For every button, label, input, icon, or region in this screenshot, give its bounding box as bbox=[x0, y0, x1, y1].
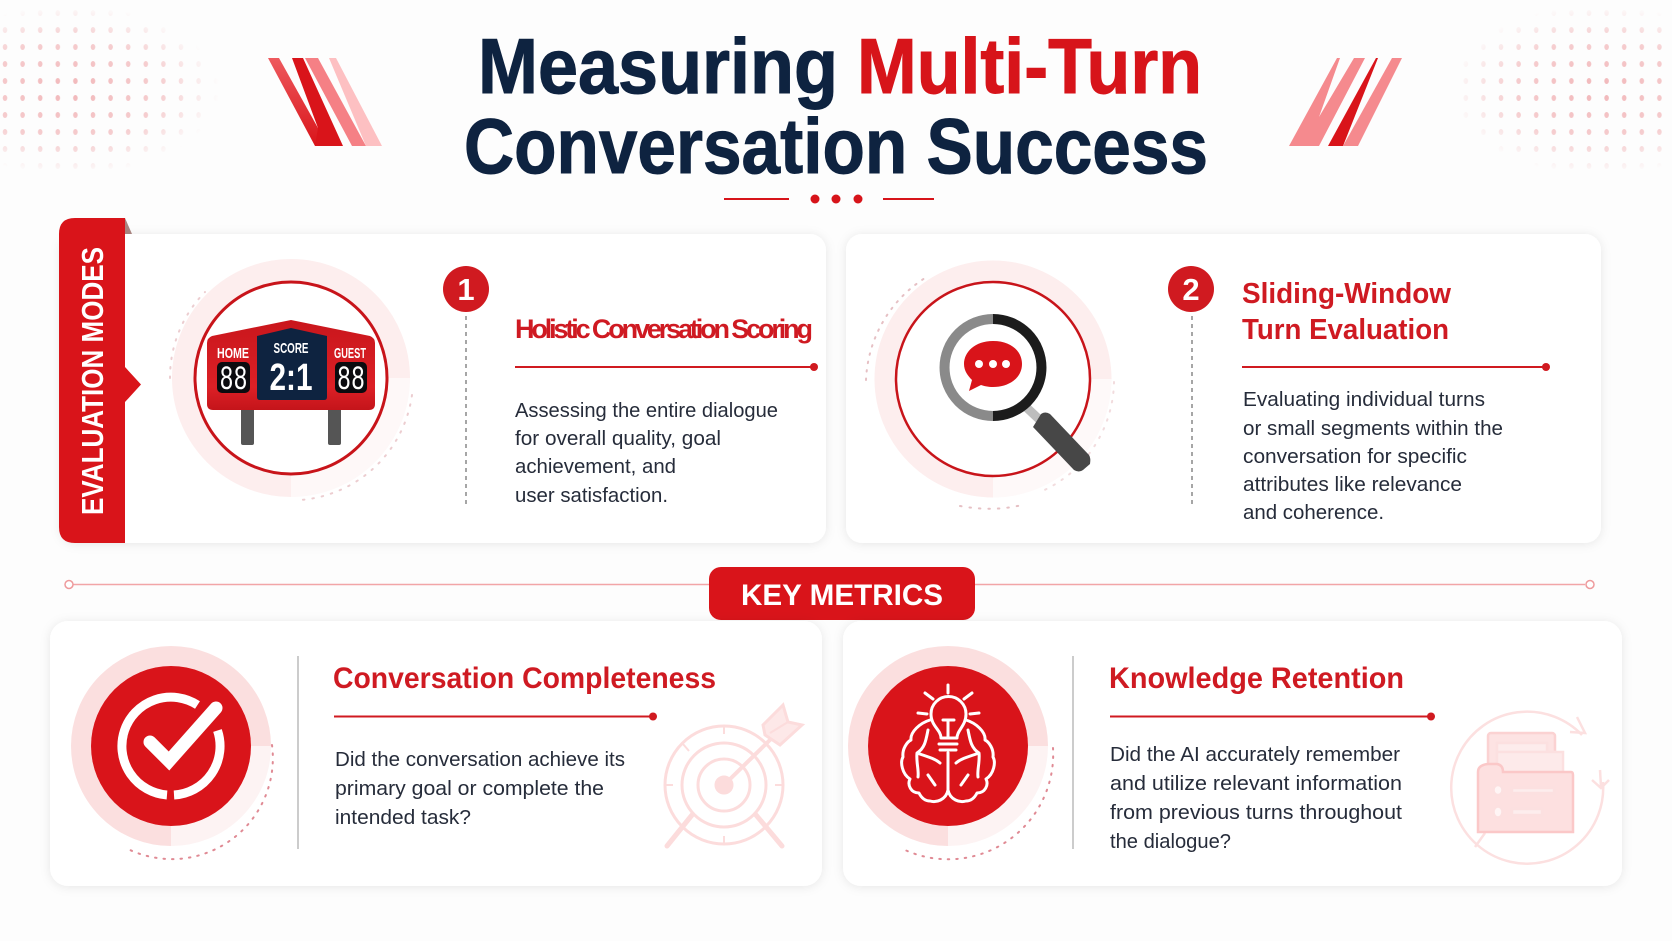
number badge 1 bbox=[443, 266, 489, 312]
number badge 1: 1 bbox=[457, 272, 475, 307]
text block: completeness description: Did the conversation achieve its bbox=[335, 748, 625, 771]
text block: sliding-window description: Evaluating individual turns bbox=[1243, 388, 1485, 411]
heading: knowledge retention: Knowledge Retention bbox=[1109, 662, 1404, 695]
title divider bbox=[724, 194, 934, 204]
text block: retention description bbox=[1110, 743, 1402, 853]
title: Multi-Turn bbox=[857, 22, 1202, 110]
text block: completeness description: primary goal or complete the bbox=[335, 777, 604, 800]
icon: faded folder and cycle arrows bbox=[1451, 712, 1609, 864]
title bbox=[464, 22, 1208, 190]
text block: sliding-window description bbox=[1243, 388, 1503, 524]
text block: retention description: from previous turns throughout bbox=[1110, 801, 1402, 824]
icon: scoreboard: SCORE bbox=[274, 340, 308, 357]
text block: holistic description bbox=[515, 399, 778, 507]
number badge 2: 2 bbox=[1182, 272, 1200, 307]
heading: sliding-window turn evaluation: Turn Evaluation bbox=[1242, 314, 1449, 346]
icon: brain and lightbulb bbox=[858, 656, 1053, 859]
label tab: evaluation modes: EVALUATION MODES bbox=[75, 247, 110, 515]
text block: retention description: Did the AI accurately remember bbox=[1110, 743, 1400, 766]
text block: sliding-window description: and coherence. bbox=[1243, 501, 1384, 524]
panel: sliding-window turn evaluation bbox=[846, 234, 1601, 543]
text block: sliding-window description: attributes like relevance bbox=[1243, 473, 1462, 496]
icon: scoreboard: 88 bbox=[337, 362, 365, 400]
title: Measuring bbox=[478, 22, 838, 110]
text block: holistic description: user satisfaction. bbox=[515, 484, 668, 507]
title: Conversation Success bbox=[464, 102, 1208, 190]
section divider: key metrics bbox=[65, 567, 1594, 620]
label tab: evaluation modes bbox=[59, 218, 141, 543]
heading: sliding-window turn evaluation bbox=[1242, 278, 1451, 346]
icon: check mark bbox=[81, 656, 273, 859]
text block: sliding-window description: conversation for specific bbox=[1243, 445, 1467, 468]
heading: holistic conversation scoring: Holistic Conversation Scoring bbox=[515, 314, 813, 344]
heading: conversation completeness: Conversation Completeness bbox=[333, 662, 716, 695]
section divider: key metrics: KEY METRICS bbox=[741, 579, 943, 612]
number badge 2 bbox=[1168, 266, 1214, 312]
panel: knowledge retention bbox=[843, 621, 1622, 886]
icon: left chevron stripes bbox=[268, 58, 382, 146]
panel: holistic conversation scoring bbox=[60, 234, 826, 543]
icon: scoreboard: 2:1 bbox=[270, 357, 312, 399]
text block: retention description: and utilize relevant information bbox=[1110, 772, 1402, 795]
panel: conversation completeness bbox=[50, 621, 822, 886]
text block: sliding-window description: or small segments within the bbox=[1243, 417, 1503, 440]
text block: holistic description: achievement, and bbox=[515, 455, 676, 478]
text block: completeness description: intended task? bbox=[335, 806, 471, 829]
icon: right chevron stripes bbox=[1289, 58, 1402, 146]
text block: holistic description: for overall quality, goal bbox=[515, 427, 721, 450]
text block: holistic description: Assessing the entire dialogue bbox=[515, 399, 778, 422]
icon: scoreboard: GUEST bbox=[334, 345, 366, 362]
icon: faded target and arrow bbox=[665, 705, 802, 846]
text block: retention description: the dialogue? bbox=[1110, 830, 1231, 853]
icon: magnifier with chat bubble bbox=[866, 272, 1114, 509]
icon: scoreboard: HOME bbox=[217, 345, 249, 362]
icon: scoreboard: 88 bbox=[220, 362, 248, 400]
text block: completeness description bbox=[335, 748, 625, 829]
icon: scoreboard bbox=[170, 271, 412, 500]
heading: sliding-window turn evaluation: Sliding-Window bbox=[1242, 278, 1451, 310]
